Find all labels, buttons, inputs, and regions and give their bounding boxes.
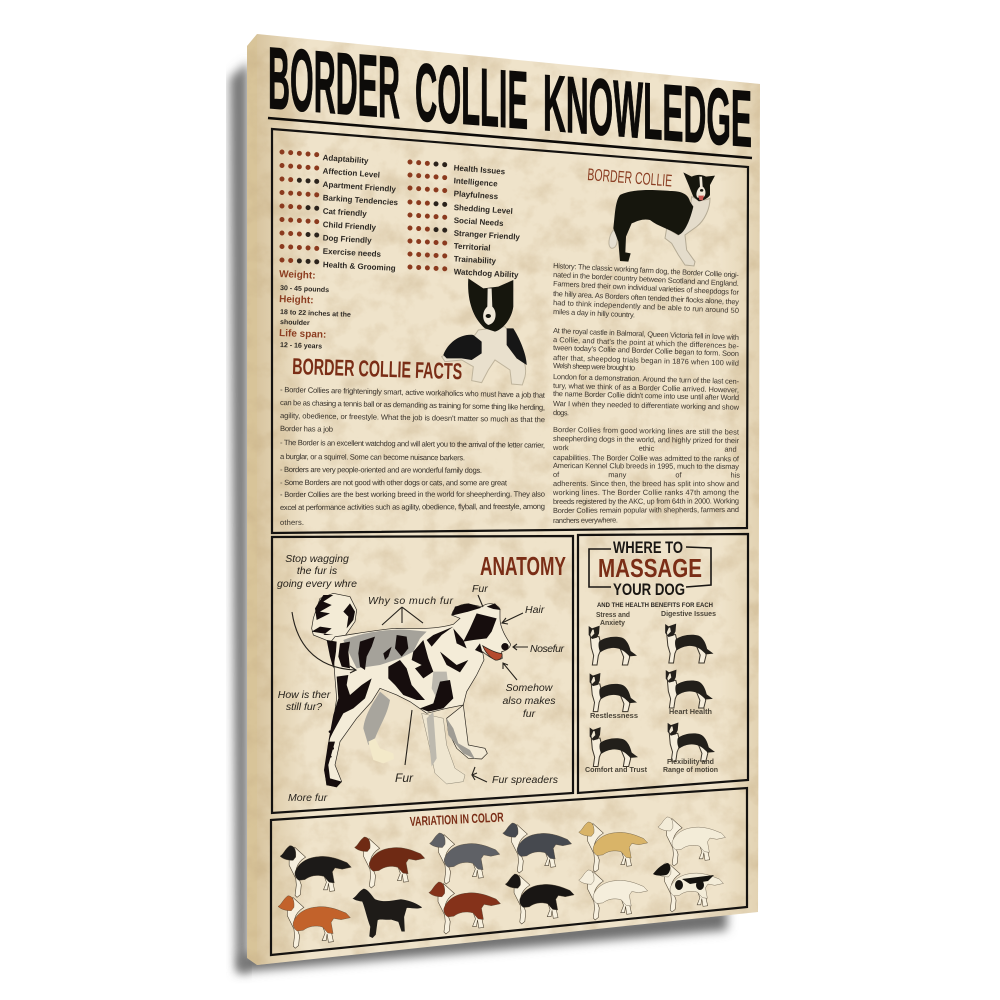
arrow: mouth <box>503 663 517 680</box>
rating list: right column <box>409 160 521 280</box>
annotation: fur under belly: Fur <box>395 771 414 785</box>
text block: history: Farmers bred their own individual varieties of sheepdogs for <box>553 279 740 297</box>
far front leg <box>447 705 487 759</box>
annotation: somehow also makes fur: fur <box>523 708 536 720</box>
text block: history: a Collie, and that's the point at which the differences be- <box>553 335 740 351</box>
rating list: left column: Child Friendly <box>323 220 377 232</box>
far rear leg <box>363 692 394 763</box>
annotation: how is there still fur: still fur? <box>286 701 322 713</box>
massage point: stress and anxiety <box>589 610 637 665</box>
annotation: top fur: Fur <box>472 583 488 595</box>
massage point: heart health: Heart Health <box>669 707 712 716</box>
arrow: hair <box>502 613 523 624</box>
annotation: nosefur: Nosefur <box>530 643 564 655</box>
rating list: left column: Apartment Friendly <box>322 180 397 194</box>
canvas: wrapped side edge <box>247 34 257 965</box>
dog: white with black patches <box>653 863 723 912</box>
text block: history: Border Collies from good working lines are still the best <box>553 425 739 437</box>
massage point: heart health <box>666 670 713 716</box>
annotation: somehow also makes fur: also makes <box>502 695 556 707</box>
text block: history: had to think independently and be able to run around 50 <box>553 298 739 315</box>
illustration: lying border collie <box>442 278 527 385</box>
arrow: tail <box>292 612 356 673</box>
annotation: hair: Hair <box>525 604 545 616</box>
dog: chocolate <box>355 837 425 888</box>
dog: cream <box>579 870 648 920</box>
text block: history: the hilly area. As Borders often tended their flocks alone, they <box>553 289 739 306</box>
rating list: left column: Barking Tendencies <box>322 193 399 207</box>
illustration: standing border collie <box>609 172 715 266</box>
massage point: stress and anxiety: Anxiety <box>600 618 625 627</box>
annotation: how is there still fur: How is ther <box>278 689 330 701</box>
rating list: left column <box>281 150 399 273</box>
massage point: digestive issues: Digestive Issues <box>661 609 716 618</box>
annotation: stop wagging: Stop wagging <box>285 553 349 565</box>
text block: facts: - Border Collies are frighteningly smart, active workaholics who must have a job that <box>280 385 546 400</box>
annotation: fur spreaders: Fur spreaders <box>492 774 559 786</box>
text block: history: after that, sheepdog trials began in 1876 when 100 wild <box>553 353 739 368</box>
grey merle patches <box>343 630 450 705</box>
massage point: restlessness: Restlessness <box>590 711 638 720</box>
illustration: merle dog anatomy <box>312 593 511 787</box>
heading: your dog: YOUR DOG <box>613 580 685 599</box>
massage point: stress and anxiety: Stress and <box>596 610 630 619</box>
massage point: flexibility and range of motion <box>663 723 718 774</box>
rating list: left column: Cat friendly <box>322 207 368 218</box>
arrow: belly fur <box>405 710 412 765</box>
annotation: why so much fur: Why so much fur <box>368 595 454 607</box>
title rule <box>268 118 752 158</box>
rating list: right column: Trainability <box>454 254 497 266</box>
text block: facts: can be as chasing a tennis ball or as demanding as training for some thing like herding, <box>280 398 545 412</box>
breed stats: shoulder <box>280 319 310 327</box>
rating list: right column: Social Needs <box>453 216 504 228</box>
text block: history: tury, what we think of as a Border Collie arrived. However, <box>553 381 739 394</box>
rating list: right column: Watchdog Ability <box>454 267 519 280</box>
breed stats: 18 to 22 inches at the <box>280 309 351 319</box>
panel: where to massage your dog <box>578 534 748 793</box>
text block: history: capabilities. The Border Collie was admitted to the ranks of <box>553 453 740 463</box>
dog: black with brown head <box>505 874 574 924</box>
annotation: stop wagging: going every whre <box>277 578 357 590</box>
text block: facts: Border has a job <box>280 424 333 434</box>
heading: where to: WHERE TO <box>613 538 683 557</box>
panel: breed profile and facts frame <box>272 129 748 533</box>
title: COLLIE <box>415 47 528 147</box>
text block: history: War I when they needed to differentiate working and show <box>553 399 740 412</box>
canvas: aged paper front <box>257 34 761 966</box>
text block: facts: - Borders are very people-oriented and are wonderful family dogs. <box>280 465 482 475</box>
arrow: three-way back <box>382 607 423 625</box>
text block: history <box>552 261 740 525</box>
dog: black and white <box>280 846 351 897</box>
massage point: flexibility and range of motion: Flexibility and <box>667 757 714 766</box>
text block: history: sheepherding dogs in the world, and highly prized for their <box>553 434 740 445</box>
text block: history: of many of his <box>553 470 740 480</box>
text block: history: nated in the border country between Scotland and England. <box>553 270 739 288</box>
rating list: left column: Adaptability <box>322 153 369 166</box>
text block: facts: a burglar, or a squirrel. Some can become nuisance barkers. <box>280 452 465 462</box>
rating list: right column: Playfulness <box>453 189 499 201</box>
arrow: fur spreaders <box>472 767 487 782</box>
dog: red brown <box>429 882 501 934</box>
dog: grey <box>430 833 500 884</box>
annotation: more fur: More fur <box>288 792 328 804</box>
rating list: right column: Stranger Friendly <box>453 229 521 242</box>
near front leg <box>422 712 465 784</box>
breed stats: Weight: <box>279 269 316 282</box>
dog: orange <box>278 896 350 948</box>
text block: history: work ethic and <box>552 443 737 454</box>
heading: border collie facts: BORDER COLLIE FACTS <box>292 353 463 384</box>
text block: history: Border Collies remain popular with shepherds, farmers and <box>553 505 739 515</box>
dog: gold <box>579 822 648 872</box>
breed stats <box>279 269 351 350</box>
text block: history: London for a demonstration. Around the turn of the last cen- <box>553 372 740 386</box>
breed stats: 12 - 16 years <box>280 342 322 350</box>
text block: history: breeds registered by the AKC, up from 64th in 2000. Working <box>553 496 739 506</box>
subtitle: AND THE HEALTH BENEFITS FOR EACH <box>597 602 713 609</box>
text block: history: adherents. Since then, the breed has split into show and <box>553 479 739 488</box>
panel: anatomy <box>272 536 573 813</box>
text block: history: working lines. The Border Collie ranks 47th among the <box>552 488 739 497</box>
arrow: nose <box>513 644 528 650</box>
rating list: left column: Dog Friendly <box>323 233 372 245</box>
massage point: restlessness <box>590 673 638 720</box>
text block: history: the name Border Collie didn't come into use until after World <box>553 389 739 402</box>
rating list: left column: Exercise needs <box>323 247 382 259</box>
heading: variation in color: VARIATION IN COLOR <box>409 809 504 829</box>
annotation: stop wagging: the fur is <box>297 565 338 577</box>
breed stats: 30 - 45 pounds <box>280 285 329 294</box>
heading: border collie: BORDER COLLIE <box>587 165 673 191</box>
rating list: right column: Shedding Level <box>453 203 513 216</box>
text block: history: Welsh sheep were brought to <box>553 361 635 372</box>
title: BORDER <box>268 28 400 137</box>
text block: facts: others. <box>280 518 304 527</box>
text block: facts: - Border Collies are the best working breed in the world for sheepherding. They also <box>280 490 545 499</box>
text block: history: American Kennel Club breeds in 1995, much to the dismay <box>553 461 739 471</box>
black merle streaks <box>312 595 509 787</box>
dog: blue merle <box>503 823 572 873</box>
text block: facts <box>280 385 546 527</box>
text block: facts: - The Border is an excellent watchdog and will alert you to the arrival of the letter carrier, <box>280 438 545 450</box>
text block: history: tween today's Collie and Border Collie began to form. Soon <box>553 343 739 358</box>
annotation: somehow also makes fur: Somehow <box>506 682 552 694</box>
rating list: right column: Health Issues <box>453 163 506 176</box>
massage title box <box>589 547 711 587</box>
text block: history: ranchers everywhere. <box>553 515 618 525</box>
massage point: comfort and trust: Comfort and Trust <box>585 765 648 774</box>
text block: facts: - Some Borders are not good with other dogs or cats, and some are great <box>280 478 508 487</box>
rating list: right column: Intelligence <box>453 176 498 189</box>
arrow: top fur <box>478 595 483 607</box>
heading: massage: MASSAGE <box>598 553 702 583</box>
breed stats: Life span: <box>279 328 326 341</box>
text block: facts: agility, obedience, or freestyle. What the job is doesn't matter so much as that the <box>280 411 545 424</box>
body <box>325 604 511 787</box>
rating list: left column: Affection Level <box>322 166 380 180</box>
text block: history: dogs. <box>553 408 569 417</box>
massage point: digestive issues <box>661 609 716 663</box>
tongue <box>483 646 502 660</box>
dog: white <box>658 817 725 866</box>
dog: solid black <box>353 889 422 938</box>
text block: history: History: The classic working farm dog, the Border Collie origi- <box>553 261 740 279</box>
massage point: flexibility and range of motion: Range of motion <box>663 765 718 774</box>
tail <box>312 593 357 642</box>
massage point: comfort and trust <box>585 727 648 774</box>
canvas drop shadow <box>230 62 727 972</box>
text block: history: miles a day in hilly country. <box>553 307 635 319</box>
rating list: left column: Health & Grooming <box>323 260 396 273</box>
text block: facts: excel at performance activities such as agility, obedience, flyball, and freestyle, among <box>280 502 545 512</box>
panel: variation in color <box>271 788 747 955</box>
heading: anatomy: ANATOMY <box>480 551 566 581</box>
breed stats: Height: <box>279 294 314 306</box>
rating list: right column: Territorial <box>454 242 491 253</box>
text block: history: At the royal castle in Balmoral, Queen Victoria fell in love with <box>553 326 739 342</box>
